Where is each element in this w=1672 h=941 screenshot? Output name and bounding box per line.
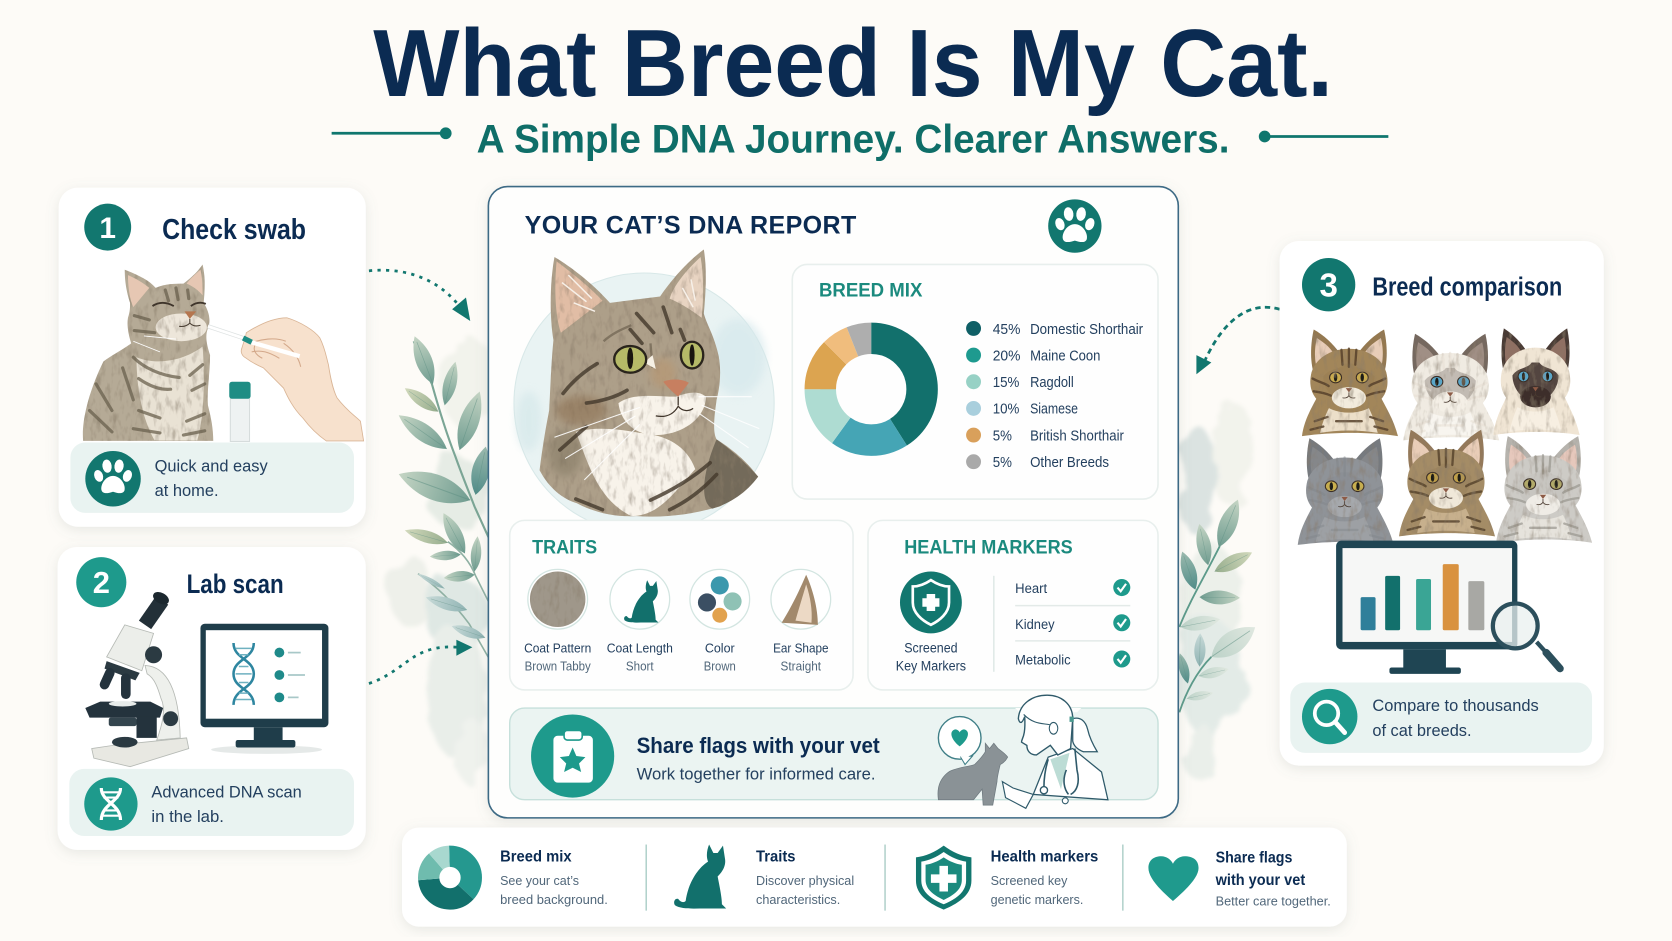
summary: breed mix: See your cat’s — [500, 873, 579, 888]
arrow: step 3 to report — [1196, 307, 1280, 374]
trait: color — [690, 569, 750, 674]
legend — [966, 321, 1143, 471]
step number 3 — [1302, 258, 1355, 311]
summary: share flags: Share flags — [1216, 850, 1292, 867]
illustration: six cat breeds — [1298, 328, 1592, 545]
panel: breed mix: BREED MIX — [819, 280, 923, 301]
summary: health markers — [916, 846, 1098, 910]
icon: clipboard badge — [531, 714, 614, 798]
panel: traits — [510, 520, 853, 690]
summary: traits: characteristics. — [756, 892, 840, 907]
illustration: tabby cat portrait — [514, 250, 774, 533]
callout: share flags: Share flags with your vet — [637, 733, 880, 758]
trait: coat length: Short — [626, 659, 654, 674]
heading: check swab: Check swab — [162, 214, 306, 246]
illustration: monitor with bar chart — [1336, 541, 1517, 674]
summary: breed mix: Breed mix — [500, 849, 572, 866]
legend: 20% — [993, 348, 1021, 364]
panel: summary bar — [402, 827, 1347, 927]
panel: step 1 check swab — [59, 188, 366, 527]
trait: coat pattern — [524, 569, 591, 674]
summary: breed mix — [429, 849, 608, 907]
icon: magnifying glass — [1493, 604, 1560, 669]
health list: Kidney — [1015, 616, 1055, 632]
summary: share flags: Better care together. — [1216, 893, 1331, 908]
legend: 5% — [993, 428, 1012, 444]
trait: color: Brown — [704, 659, 736, 674]
panel: DNA report — [488, 187, 1178, 818]
step number 2: 2 — [93, 565, 110, 600]
health list: Heart — [1015, 580, 1047, 596]
panel: health markers — [868, 520, 1158, 690]
panel: breed mix — [792, 264, 1158, 499]
step number 1 — [84, 204, 131, 251]
callout: compare to thousands: Compare to thousands — [1372, 696, 1539, 715]
legend: Maine Coon — [1030, 348, 1100, 364]
callout: quick and easy: Quick and easy — [155, 456, 268, 475]
callout: advanced DNA scan: in the lab. — [151, 807, 224, 826]
summary: traits — [674, 845, 854, 909]
arrow: step 1 to report — [369, 270, 470, 321]
legend: Other Breeds — [1030, 455, 1109, 471]
callout: quick and easy: at home. — [155, 481, 219, 500]
icon: screened shield — [896, 572, 966, 674]
summary: share flags: with your vet — [1215, 872, 1306, 889]
summary: health markers: genetic markers. — [991, 892, 1083, 907]
callout: advanced DNA scan: Advanced DNA scan — [151, 783, 302, 802]
summary: traits: Discover physical — [756, 873, 854, 888]
legend: 45% — [993, 322, 1021, 338]
trait: ear shape: Ear Shape — [773, 641, 829, 656]
legend: Ragdoll — [1030, 375, 1074, 391]
legend: 15% — [993, 375, 1020, 391]
legend: 10% — [993, 402, 1020, 418]
summary: health markers: Screened key — [991, 873, 1068, 888]
heading: breed comparison: Breed comparison — [1372, 273, 1562, 301]
summary: share flags — [1148, 850, 1331, 908]
decorative foliage left — [388, 333, 495, 786]
trait: ear shape: Straight — [781, 659, 821, 674]
illustration: cat being swabbed — [83, 264, 226, 441]
step number 2 — [76, 557, 126, 607]
trait: ear shape — [771, 569, 831, 674]
legend: Domestic Shorthair — [1030, 322, 1143, 338]
panel: traits: TRAITS — [532, 537, 597, 558]
illustration: vet with cat — [938, 695, 1108, 808]
icon: screened shield: Screened — [904, 640, 958, 656]
arrow: step 2 to report — [369, 640, 472, 684]
subtitle with flanking lines: A Simple DNA Journey. Clearer Answers. — [477, 117, 1229, 161]
panel: health markers: HEALTH MARKERS — [904, 537, 1073, 558]
trait: coat pattern: Coat Pattern — [524, 641, 591, 656]
illustration: monitor with DNA — [200, 624, 328, 754]
callout: share flags — [510, 695, 1158, 808]
panel: step 2 lab scan — [58, 547, 366, 850]
step number 1: 1 — [99, 212, 116, 245]
legend: British Shorthair — [1030, 428, 1124, 444]
decorative foliage right — [1174, 400, 1261, 782]
summary: health markers: Health markers — [991, 849, 1098, 866]
donut chart — [820, 338, 922, 440]
callout: share flags: Work together for informed care. — [637, 764, 875, 783]
callout: compare to thousands: of cat breeds. — [1372, 721, 1472, 740]
icon: screened shield: Key Markers — [896, 658, 966, 674]
trait: color: Color — [705, 641, 735, 656]
callout: compare to thousands — [1290, 682, 1592, 753]
panel: step 3 breed comparison — [1280, 241, 1604, 766]
heading: lab scan: Lab scan — [187, 569, 284, 599]
report heading: YOUR CAT’S DNA REPORT — [525, 212, 857, 240]
illustration: microscope — [85, 589, 189, 767]
step number 3: 3 — [1319, 267, 1338, 304]
icon: paw badge — [1048, 199, 1102, 253]
trait: coat length — [607, 569, 673, 674]
callout: advanced DNA scan — [69, 769, 354, 836]
illustration: hand with swab — [208, 318, 364, 441]
summary: traits: Traits — [756, 849, 796, 866]
health list: Metabolic — [1015, 651, 1071, 667]
legend: Siamese — [1030, 402, 1078, 418]
health list — [1015, 579, 1130, 668]
trait: coat pattern: Brown Tabby — [525, 659, 591, 674]
callout: quick and easy — [70, 443, 354, 513]
title: What Breed Is My Cat. — [373, 10, 1333, 117]
trait: coat length: Coat Length — [607, 641, 673, 656]
summary: breed mix: breed background. — [500, 892, 608, 907]
legend: 5% — [993, 455, 1012, 471]
illustration: sample tube — [229, 382, 251, 441]
